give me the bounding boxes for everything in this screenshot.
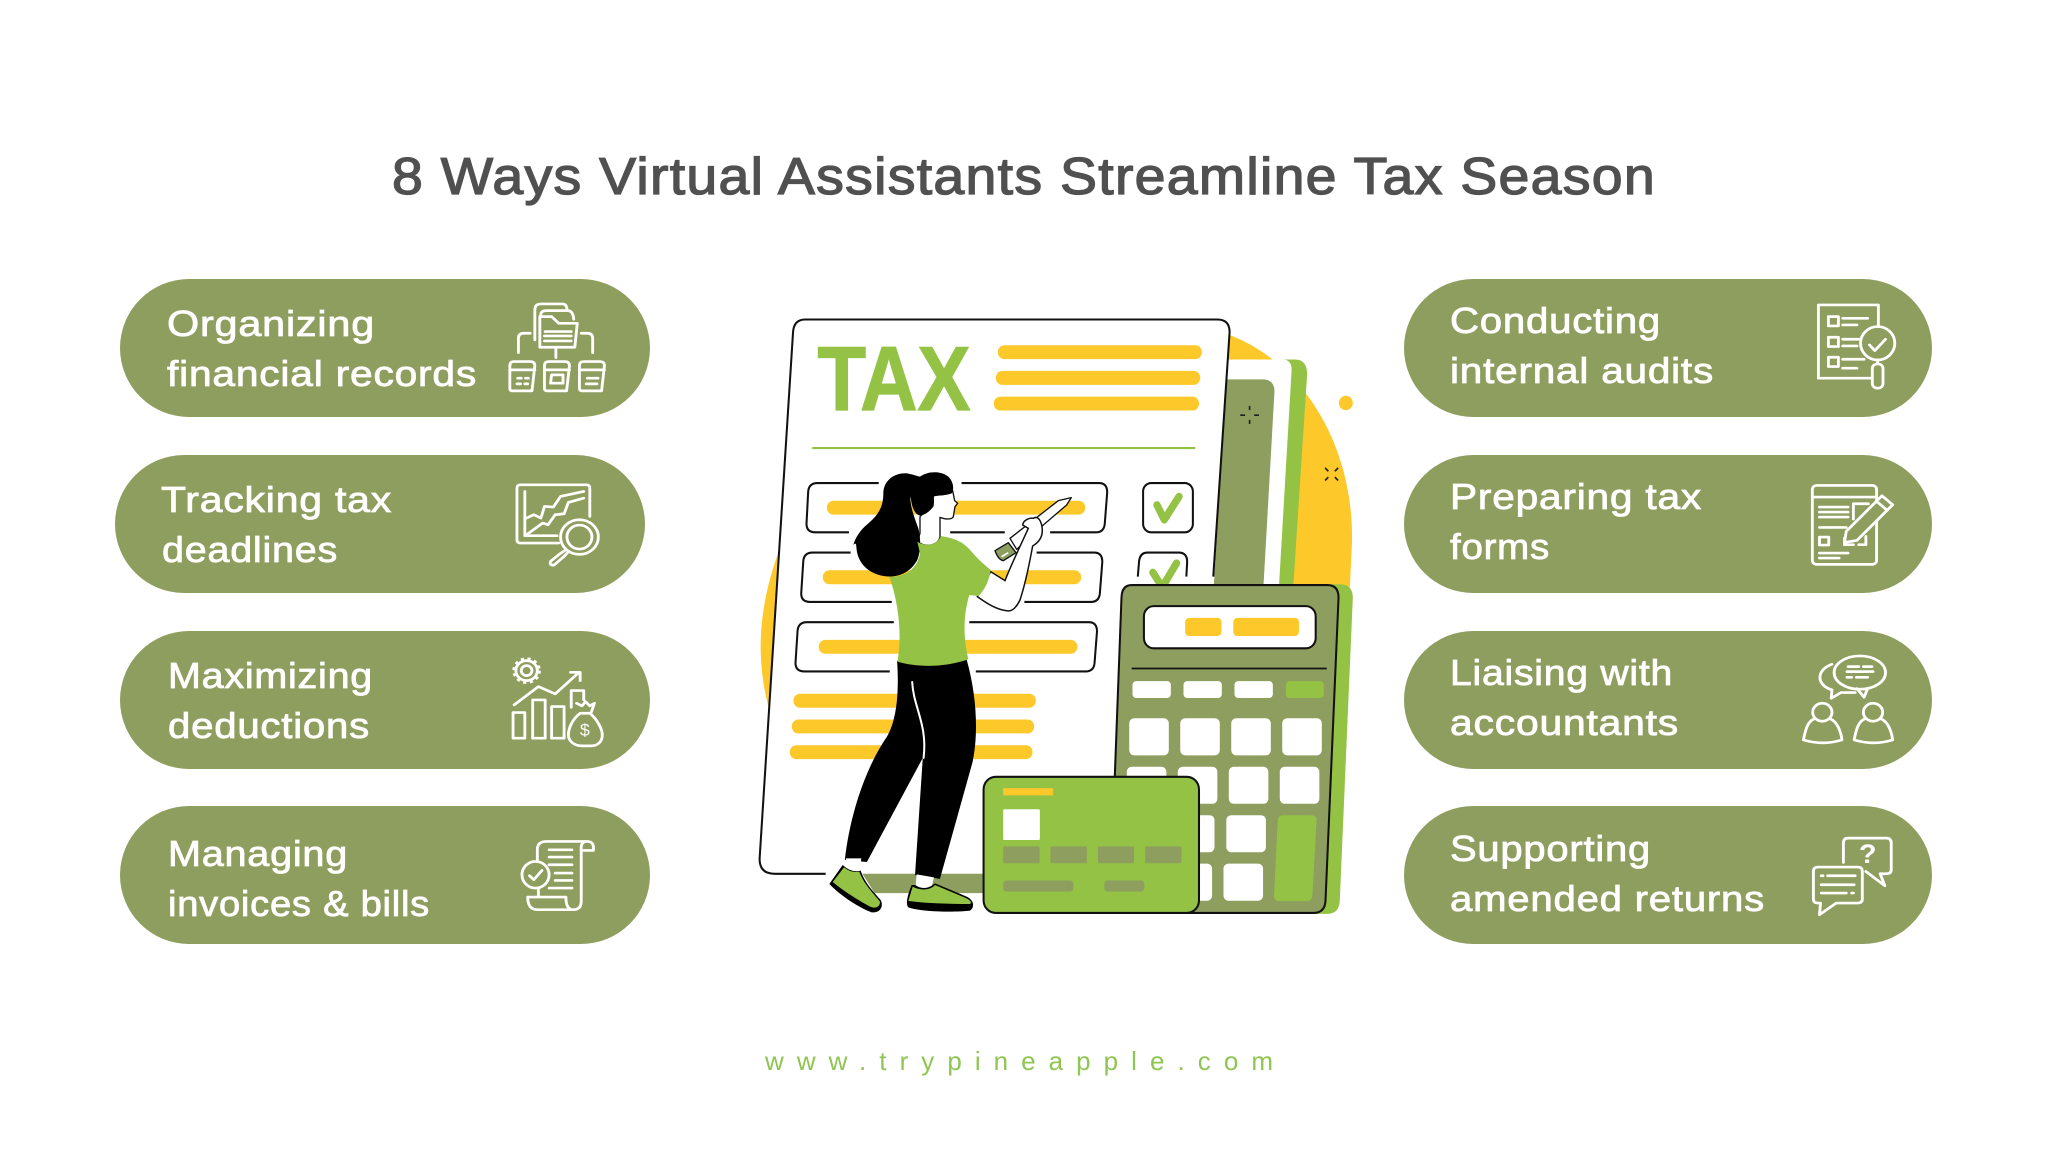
panel: conducting internal audits: Conducting [1450,300,1661,341]
icon: question chat bubbles: ? [1859,839,1876,869]
panel: supporting amended returns: Supporting [1450,828,1651,869]
panel: organizing financial records: Organizing [167,303,375,344]
panel: supporting amended returns: amended returns [1450,878,1765,919]
panel: conducting internal audits [1404,279,1932,417]
hair [853,472,953,577]
panel: managing invoices and bills: invoices & bills [168,883,430,924]
face and neck [917,491,958,545]
title: 8 Ways Virtual Assistants Streamline Tax Season [392,148,1656,206]
icon: form with pencil [1812,485,1893,564]
credit card [984,777,1199,913]
panel: liaising with accountants: accountants [1450,702,1679,743]
illustration: tax form, person, calculator and card [760,320,1353,914]
panel: conducting internal audits: internal audits [1450,350,1714,391]
icon: audit checklist [1818,305,1895,388]
header lines [994,345,1202,411]
panel: organizing financial records: financial records [167,353,477,394]
person upper body [853,472,1071,666]
footer website: www.trypineapple.com [764,1046,1273,1076]
icon: growth chart and money bag [513,659,602,746]
checkboxes [1138,483,1193,587]
yellow background blob [761,334,1352,712]
sparkles [1240,406,1338,481]
calculator [1115,584,1353,914]
shirt [889,536,991,666]
panel: maximizing deductions: deductions [168,705,370,746]
panel: tracking tax deadlines: deadlines [162,529,338,570]
icon: folders [510,304,604,391]
panel: tracking tax deadlines [115,455,645,593]
tax form paper [760,320,1230,893]
icon: two people talking [1803,656,1893,743]
panel: supporting amended returns [1404,806,1932,944]
panel: liaising with accountants: Liaising with [1450,652,1673,693]
icon: invoice scroll [522,841,594,910]
panel: organizing financial records [120,279,650,417]
pen [995,498,1071,561]
TAX heading: TAX [818,328,971,429]
panel: preparing tax forms: forms [1450,526,1550,567]
panel: managing invoices and bills [120,806,650,944]
trousers [845,659,976,879]
yellow dot [1339,396,1353,410]
panel: maximizing deductions: Maximizing [168,655,373,696]
back sheets [1213,360,1307,593]
shoes [829,858,973,912]
icon: growth chart and money bag: $ [580,720,590,739]
icon: chart with magnifier [517,485,598,565]
icon: question chat bubbles [1813,838,1891,915]
panel: maximizing deductions [120,631,650,769]
form fields [795,483,1107,671]
panel: preparing tax forms: Preparing tax [1450,476,1702,517]
raised arm [977,517,1042,611]
bottom text lines [790,694,1036,759]
panel: managing invoices and bills: Managing [168,833,348,874]
panel: preparing tax forms [1404,455,1932,593]
panel: liaising with accountants [1404,631,1932,769]
panel: tracking tax deadlines: Tracking tax [161,479,392,520]
